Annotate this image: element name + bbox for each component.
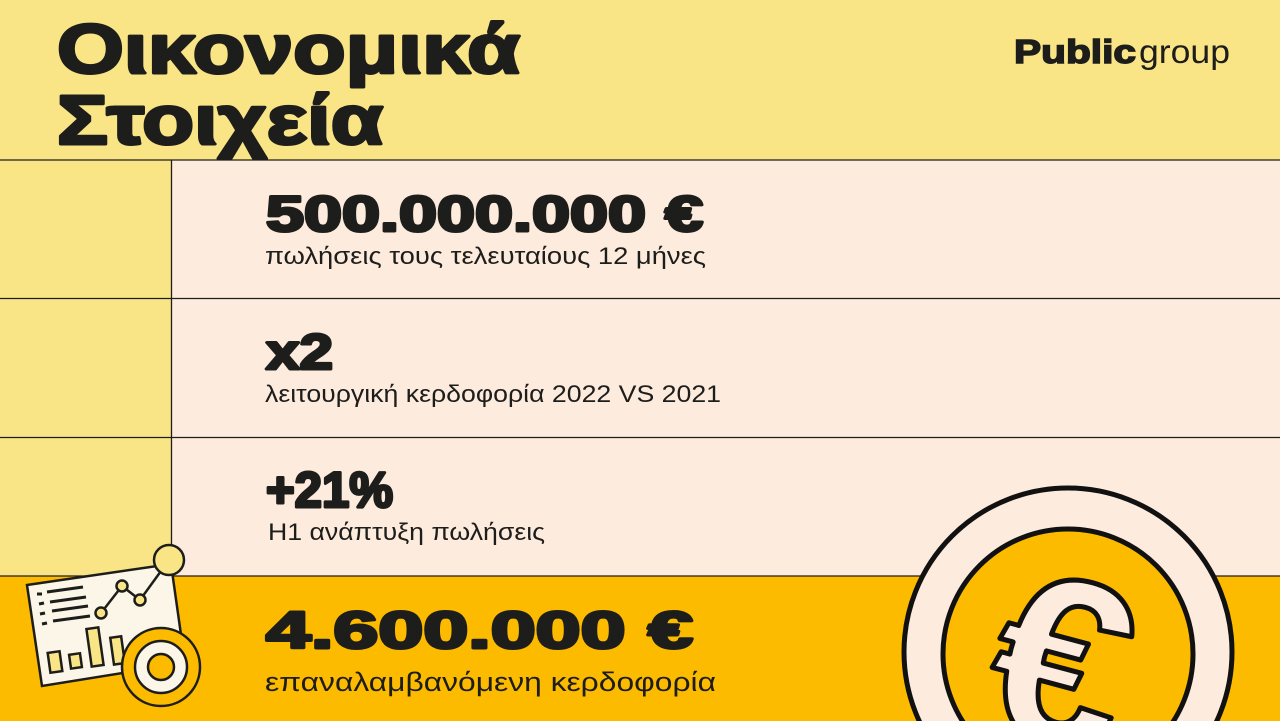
stat 4: [265, 602, 716, 697]
logo: group: [1139, 33, 1230, 70]
left column: [0, 160, 171, 576]
bottom panel: [0, 576, 1280, 721]
stat 4: 4.600.000 €: [266, 602, 693, 660]
title: Στοιχεία: [57, 81, 383, 159]
stat 2: λειτουργική κερδοφορία 2022 VS 2021: [265, 381, 721, 408]
header panel: [0, 0, 1280, 160]
stat 3: +21%: [266, 462, 393, 518]
title: Οικονομικά: [57, 10, 520, 88]
stat 1: [265, 186, 706, 270]
stat 1: πωλήσεις τους τελευταίους 12 μήνες: [265, 243, 706, 270]
stat 3: Η1 ανάπτυξη πωλήσεις: [268, 519, 545, 546]
stat 3: [266, 462, 545, 546]
icon: chart report: [27, 545, 200, 706]
stat 1: 500.000.000 €: [266, 186, 703, 242]
icon: euro coin: [904, 488, 1232, 721]
stat 2: [265, 324, 721, 408]
stat 2: x2: [266, 324, 333, 380]
logo: [1014, 33, 1230, 70]
stat 4: επαναλαμβανόμενη κερδοφορία: [265, 667, 716, 697]
title: [57, 10, 520, 159]
logo: Public: [1014, 33, 1136, 70]
